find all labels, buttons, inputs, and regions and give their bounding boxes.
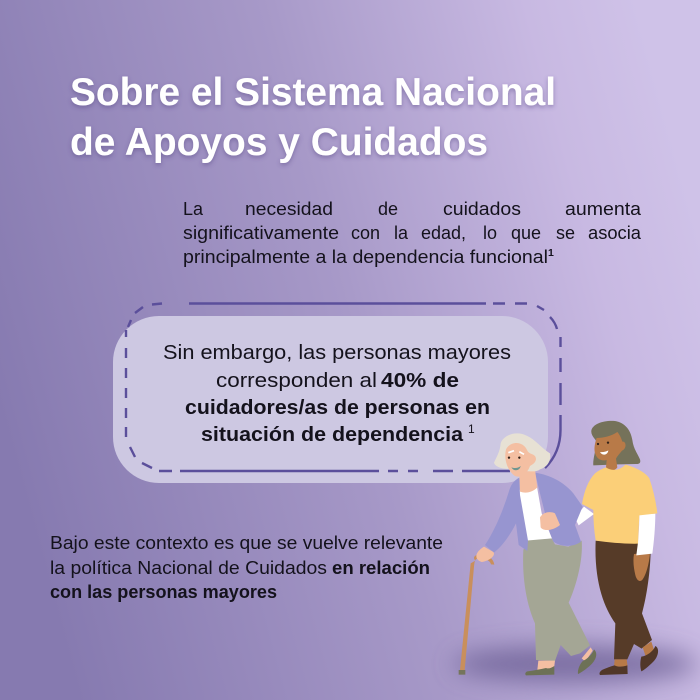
- eyebrows: [508, 451, 524, 454]
- intro paragraph: significativamente: [183, 223, 339, 243]
- feet: [614, 659, 628, 667]
- closing text: la política Nacional de Cuidados: [50, 558, 327, 578]
- callout text: situación de dependencia: [201, 423, 464, 446]
- closing text: [50, 533, 443, 602]
- closing text: con las personas mayores: [50, 582, 277, 602]
- callout text: 1: [468, 422, 475, 436]
- callout background: [113, 316, 548, 483]
- mouth: [511, 466, 521, 470]
- shirt: [582, 465, 657, 544]
- cardigan left: [485, 478, 528, 553]
- front sleeve: [636, 514, 655, 555]
- closing text: en relación: [332, 558, 430, 578]
- smile: [600, 450, 608, 455]
- cane: [460, 555, 494, 670]
- intro paragraph: La: [183, 199, 204, 219]
- front hand: [633, 553, 650, 581]
- hair: [591, 421, 640, 465]
- intro paragraph: con: [351, 223, 380, 243]
- intro paragraph: 1: [548, 247, 554, 259]
- trousers: [595, 541, 652, 659]
- callout text: 40% de: [381, 369, 459, 392]
- intro paragraph: la: [394, 223, 409, 243]
- intro paragraph: que: [511, 223, 541, 243]
- callout text: corresponden al: [216, 369, 377, 392]
- cardigan right: [535, 473, 583, 546]
- ground shadow: [453, 645, 697, 683]
- intro paragraph: principalmente a la dependencia funcional: [183, 247, 548, 267]
- callout panel: [113, 304, 560, 483]
- intro paragraph: edad,: [421, 223, 466, 243]
- hair: [494, 433, 550, 471]
- face: [505, 443, 536, 477]
- title: [70, 71, 556, 164]
- white top: [519, 485, 552, 541]
- intro paragraph: de: [378, 199, 398, 219]
- intro paragraph: asocia: [588, 223, 642, 243]
- feet: [537, 661, 555, 670]
- dashed border: [126, 304, 560, 471]
- intro paragraph: cuidados: [443, 199, 521, 219]
- intro paragraph: se: [556, 223, 575, 243]
- title: de Apoyos y Cuidados: [70, 121, 488, 164]
- younger woman: [575, 421, 658, 675]
- trousers: [523, 538, 590, 661]
- intro paragraph: lo: [483, 223, 497, 243]
- face and neck: [594, 432, 626, 470]
- callout text: Sin embargo, las personas mayores: [163, 341, 511, 364]
- cane hand: [476, 547, 494, 562]
- intro paragraph: aumenta: [565, 199, 642, 219]
- intro paragraph: [183, 199, 642, 267]
- callout text: [163, 341, 511, 446]
- back arm sleeve: [575, 507, 594, 525]
- callout text: cuidadores/as de personas en: [185, 396, 490, 419]
- closing text: Bajo este contexto es que se vuelve relevante: [50, 533, 443, 553]
- fist: [540, 512, 560, 530]
- neck and chest: [519, 469, 537, 493]
- older woman: [459, 433, 596, 675]
- illustration: two women walking: [459, 421, 658, 675]
- title: Sobre el Sistema Nacional: [70, 71, 556, 114]
- intro paragraph: necesidad: [245, 199, 333, 219]
